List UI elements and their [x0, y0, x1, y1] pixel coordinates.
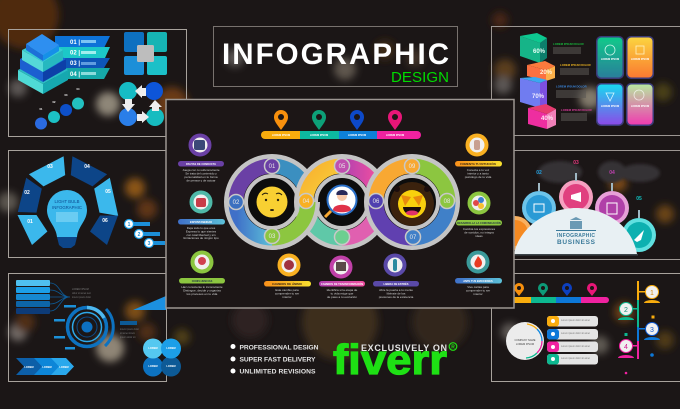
- 3D percentage cubes: 70%: [532, 94, 545, 100]
- concentric target chart: [68, 308, 113, 346]
- step circles: 03: [573, 160, 579, 166]
- chart: ascending spheres: [35, 87, 84, 130]
- callout: espontaneidad: limitaciones de ningún tipo: [183, 236, 219, 240]
- 3D percentage cubes: 20%: [540, 70, 553, 76]
- callout: libera de estrés: Abre la puerta a tu mente: [379, 288, 413, 292]
- company circle: [506, 322, 544, 360]
- icon: pink pin: [388, 110, 402, 130]
- cube captions: [553, 42, 592, 121]
- list rows: Lorem ipsum dolor sit amet: [561, 345, 590, 348]
- numbered arrow tabs: 1: [128, 222, 131, 228]
- callout: cambios de ánimo: Este cambio para: [275, 288, 299, 292]
- light bulb: INFOGRAPHIC: [52, 205, 82, 210]
- ribbon list: [55, 36, 110, 79]
- callout: pautas de conducta: [178, 136, 224, 182]
- callout: fomenta tu intuición: interior y a tanto: [467, 172, 489, 176]
- callout: ante tus emociones: Vive cartas para: [467, 285, 489, 289]
- ribbon list: 04 |: [70, 72, 80, 78]
- 3D percentage cubes: [520, 33, 556, 129]
- callout: fomenta tu intuición: Conecta a tu voz: [467, 168, 490, 172]
- panel: light bulb infographic: [8, 150, 166, 258]
- list rows: [547, 316, 598, 364]
- gradient cards: LOREM IPSUM: [631, 104, 649, 108]
- callout: libera de estrés: presiones de la existencia: [379, 295, 414, 299]
- overlapping circles: [143, 338, 181, 376]
- callout: fomenta tu intuición: [455, 136, 502, 179]
- callout: desarrolla la comunicación: [456, 194, 502, 238]
- bulb segments: 01: [27, 219, 33, 225]
- ring: left lower crossing segment: [272, 202, 318, 248]
- callout: confluencias: Haz consciente lo inconsciente: [181, 285, 223, 289]
- icon: star-eyes face: [390, 182, 434, 226]
- ring: middle: [296, 156, 388, 248]
- stacked labels: lorem ipsum dolor: [72, 296, 91, 299]
- chevron process: [16, 358, 74, 375]
- target side labels: sit amet lorem: [120, 332, 135, 335]
- cube captions: LOREM IPSUM DOLOR: [556, 84, 587, 88]
- icon: green pin: [312, 110, 326, 130]
- overlapping circles: LOREM: [166, 364, 176, 368]
- bulb segments: 04: [84, 164, 90, 170]
- callout: confluencias: [179, 252, 225, 296]
- list rows: Lorem ipsum dolor sit amet: [561, 319, 590, 322]
- numbered arrow tabs: 2: [138, 232, 141, 238]
- cube captions: LOREM IPSUM DOLOR: [561, 108, 592, 112]
- ring number nodes: 09: [409, 164, 416, 170]
- callout: pautas de conducta: PAUTAS DE CONDUCTA: [186, 162, 216, 166]
- semicircle title: BUSINESS: [557, 239, 596, 246]
- chevron process: LOREM: [24, 365, 34, 369]
- 3D percentage cubes: 60%: [533, 49, 546, 55]
- step circles: 02: [536, 170, 542, 176]
- callout: confluencias: los procesos en tu vida: [187, 292, 218, 296]
- chart: ascending spheres: 01: [40, 107, 43, 111]
- four square cards: [124, 32, 167, 75]
- pin bar: LOREM IPSUM: [272, 133, 290, 137]
- callout: cambios de ánimo: interior: [282, 295, 292, 299]
- world map silhouette: [538, 161, 660, 183]
- gradient cards: LOREM IPSUM: [601, 57, 619, 61]
- ring: left: [226, 156, 318, 248]
- panel: 3D cubes infographic: [492, 26, 680, 136]
- icon: registered mark: R: [451, 344, 455, 350]
- chevron process: LOREM: [42, 365, 52, 369]
- icon: stacked 3D pyramid: [18, 34, 68, 94]
- callout: espontaneidad: con total libertad y sin: [186, 233, 216, 237]
- heading: INFOGRAPHIC: [222, 38, 449, 71]
- callout: confluencias: CONFLUENCIAS: [192, 279, 213, 283]
- ring number nodes: 08: [444, 199, 451, 205]
- callout: pautas de conducta: personalidad en tu forma: [184, 175, 218, 179]
- step circles: [498, 160, 656, 252]
- callout: pautas de conducta: Se trata del contenido y: [185, 172, 217, 176]
- ring: right: [366, 156, 458, 248]
- stacked labels: [16, 280, 91, 314]
- step circles: 05: [636, 196, 642, 202]
- callout: libera de estrés: libérate de las: [387, 292, 406, 296]
- panel: central infographic: [166, 100, 514, 308]
- icon: person with magnifier: [325, 186, 356, 217]
- bulb segments: 05: [105, 189, 111, 195]
- pin bar: LOREM IPSUM: [386, 133, 404, 137]
- gradient cards: LOREM IPSUM: [631, 57, 649, 61]
- panel: pyramid infographics: [8, 30, 186, 136]
- ring number nodes: 03: [269, 234, 276, 240]
- callout: ante tus emociones: [455, 252, 502, 296]
- numbered arrow tabs: 3: [148, 241, 151, 247]
- feature bullet list: SUPER FAST DELIVERY: [240, 356, 316, 364]
- callout: fomenta tu intuición: FOMENTA TU INTUICIÓN: [460, 161, 496, 166]
- feature bullet list: PROFESSIONAL DESIGN: [240, 344, 319, 352]
- callout: cambios de transformación: de paso a tu evolución: [327, 295, 357, 299]
- target side labels: ipsum dolor sit: [120, 336, 136, 339]
- ring number nodes: 01: [269, 164, 276, 170]
- list rows: Lorem ipsum dolor sit amet: [561, 332, 590, 335]
- callout: cambios de transformación: tu vida exige que: [331, 292, 354, 296]
- gradient cards: LOREM IPSUM: [601, 104, 619, 108]
- pin bar: LOREM IPSUM: [348, 133, 366, 137]
- ring number nodes: 02: [233, 200, 240, 206]
- 3D percentage cubes: 40%: [541, 116, 554, 122]
- ring number nodes: 07: [410, 235, 417, 241]
- ribbon list: 03 |: [70, 61, 80, 67]
- callout: fomenta tu intuición: psicólogo de tu vida: [465, 175, 492, 179]
- company circle: COMPANY NAME: [514, 338, 536, 342]
- panel: infographic business: [498, 150, 680, 260]
- callout: desarrolla la comunicación: ideas: [475, 234, 483, 238]
- vertical timeline: [618, 281, 660, 374]
- step circles: 04: [609, 170, 615, 176]
- light bulb: [47, 190, 87, 248]
- cube captions: LOREM IPSUM DOLOR: [560, 63, 591, 67]
- chevron process: LOREM: [59, 365, 69, 369]
- bulb segments: [18, 156, 118, 245]
- location pin row: [514, 283, 609, 303]
- callout: desarrolla la comunicación: Cambia tus expresiones: [463, 227, 496, 231]
- callout: espontaneidad: Deja todo lo que eres: [187, 226, 216, 230]
- numbered arrow tabs: [124, 220, 165, 248]
- icon: orange pin: [274, 110, 288, 130]
- tagline: EXCLUSIVELY ON: [361, 343, 447, 353]
- icon: bank building: [570, 217, 582, 229]
- list rows: Lorem ipsum dolor sit amet: [561, 357, 590, 360]
- stacked labels: dolor sit amet text: [72, 292, 91, 295]
- callout: libera de estrés: [373, 256, 419, 299]
- gradient cards: [596, 36, 654, 126]
- overlapping circles: LOREM: [148, 346, 158, 350]
- ribbon list: 01 |: [70, 40, 80, 46]
- callout: pautas de conducta: Juega con tu subconsciente: [182, 168, 220, 172]
- vertical timeline: 4: [624, 344, 628, 351]
- callout: cambios de transformación: Identifica si la etapa de: [327, 288, 358, 292]
- semicircle title: [514, 208, 638, 256]
- chart: ascending spheres: 03: [65, 93, 68, 97]
- icon: thinking face: [256, 186, 288, 218]
- callout: espontaneidad: [178, 192, 225, 240]
- target side labels: lorem ipsum dolor: [120, 328, 139, 331]
- pin bar: LOREM IPSUM: [310, 133, 328, 137]
- feature bullet list: [230, 344, 319, 376]
- title box: [214, 26, 458, 86]
- company circle: LOREM IPSUM: [516, 342, 534, 346]
- ring number nodes: [228, 158, 454, 244]
- feature bullet list: UNLIMITED REVISIONS: [240, 368, 316, 376]
- callout: ante tus emociones: comprender tu ser: [466, 288, 490, 292]
- chart: ascending spheres: 04: [77, 87, 80, 91]
- overlapping circles: LOREM: [148, 364, 158, 368]
- vertical timeline: 3: [650, 327, 654, 334]
- callout: libera de estrés: LIBERA DE ESTRÉS: [384, 281, 409, 286]
- fiverr logo: fiverr: [333, 336, 447, 383]
- subheading: DESIGN: [391, 69, 449, 86]
- blue triangle chart: [133, 296, 166, 310]
- pin bar: [261, 131, 421, 139]
- callout: cambios de ánimo: [264, 256, 311, 299]
- panel: blue data infographics: [8, 274, 181, 382]
- callout: cambios de transformación: [319, 258, 365, 299]
- circular arrow cycle: [119, 82, 164, 126]
- bulb segments: 03: [47, 164, 53, 170]
- callout: ante tus emociones: interior: [473, 292, 483, 296]
- light bulb: LIGHT BULB: [54, 199, 80, 204]
- icon: blue pin: [350, 110, 364, 130]
- ring number nodes: 05: [339, 164, 346, 170]
- bulb segments: 06: [102, 218, 108, 224]
- vertical timeline: 2: [624, 307, 628, 314]
- overlapping circles: LOREM: [166, 346, 176, 350]
- callout: cambios de transformación: CAMBIOS DE TRANSFORMACIÓN: [321, 281, 363, 286]
- callout: desarrolla la comunicación: de sonidos, no integra: [464, 230, 494, 234]
- ribbon list: 02 |: [70, 50, 80, 56]
- callout: ante tus emociones: ANTE TUS EMOCIONES: [463, 279, 493, 283]
- cube captions: LOREM IPSUM DOLOR: [553, 42, 584, 46]
- callout: confluencias: Distingue, decide y organiza: [183, 288, 221, 292]
- ring number nodes: 06: [373, 199, 380, 205]
- chart: ascending spheres: 02: [53, 100, 56, 104]
- callout: espontaneidad: ESPONTANEIDAD: [190, 220, 212, 224]
- vertical timeline: 1: [650, 290, 654, 297]
- semicircle title: INFOGRAPHIC: [557, 233, 595, 239]
- callout: desarrolla la comunicación: DESARROLLA LA COMUNICACIÓN: [457, 220, 501, 225]
- bulb segments: 02: [24, 190, 30, 196]
- callout: cambios de ánimo: CAMBIOS DE ÁNIMO: [272, 281, 303, 286]
- callout: pautas de conducta: de pensar y de actuar: [186, 178, 216, 182]
- callout: cambios de ánimo: comprender tu ser: [275, 292, 299, 296]
- target side labels: [54, 305, 139, 350]
- ring number nodes: 04: [303, 199, 310, 205]
- stacked labels: LOREM IPSUM: [72, 288, 89, 291]
- callout: espontaneidad: Expresa lo que sientes: [186, 230, 217, 234]
- panel: pins, list and timeline: [492, 274, 680, 382]
